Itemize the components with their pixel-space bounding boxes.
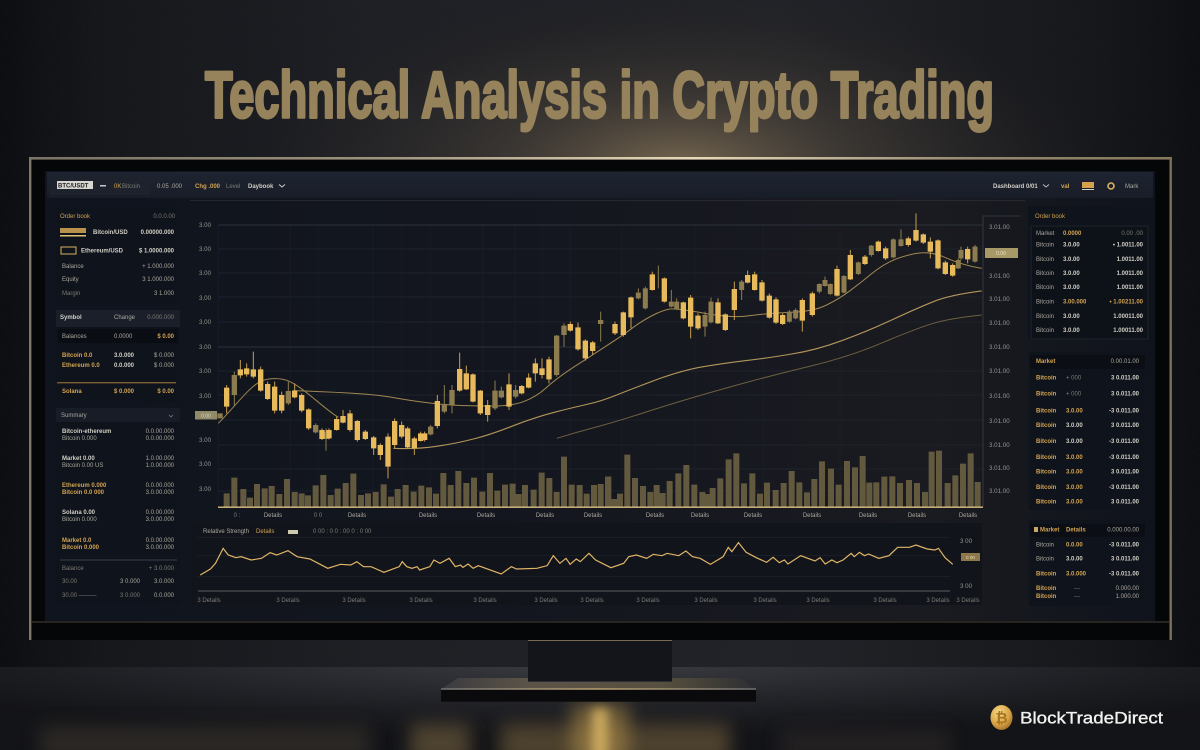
logo: BlockTradeDirect <box>990 705 1163 730</box>
oscillator time labels: 3 Details <box>694 598 718 604</box>
panel: left positions table: Change <box>114 315 136 321</box>
panel: right summary list: 3.0.00 <box>1066 556 1083 562</box>
time axis labels: Details <box>536 513 554 519</box>
logo: BlockTradeDirect: BlockTradeDirect <box>1020 708 1163 728</box>
panel: right order book: 0.00 .00 <box>1121 231 1144 237</box>
panel: right trades list: 0.00.01.00 <box>1111 359 1140 365</box>
panel: left order list: 3 1.000 <box>154 291 175 297</box>
oscillator right scale: 0 00 <box>966 555 975 560</box>
panel: right order book: 3.0.00 <box>1063 271 1080 277</box>
panel: right order book: 3.0.00 <box>1063 242 1080 248</box>
lower oscillator panel: 0 00 : 0 0 : 00 0 : 0 00 <box>313 529 372 535</box>
panel: right order book: 1.0011.00 <box>1117 285 1144 291</box>
panel: left order list: 3 1.000.000 <box>142 277 175 283</box>
top toolbar: Bitcoin <box>122 184 140 190</box>
oscillator time labels: 3 Details <box>926 598 950 604</box>
panel: left footer stats: 30.00 <box>62 579 78 585</box>
top toolbar: Level <box>226 184 240 190</box>
top toolbar: 0.05 .000 <box>157 184 183 190</box>
panel: right order book: 1.0011.00 <box>1117 257 1144 263</box>
panel: right summary list: 0.000.00.00 <box>1107 528 1140 534</box>
panel: left asset pairs: Bitcoin 0.000 <box>62 517 97 523</box>
oscillator time labels: 3 Details <box>197 598 221 604</box>
moving average lines <box>218 253 982 449</box>
panel: right order book: • 1.0011.00 <box>1113 242 1144 248</box>
panel: left asset pairs: 0.0.00.000 <box>146 538 175 544</box>
panel: left positions table: $ 0.000 <box>154 363 175 369</box>
panel: left asset pairs: 0.0.00.000 <box>146 510 175 516</box>
panel: right order book: Bitcoin <box>1036 285 1054 291</box>
time axis labels: Details <box>646 513 664 519</box>
panel: right summary list: 1.000.00 <box>1116 594 1140 600</box>
panel: right summary list: Bitcoin <box>1036 542 1054 548</box>
chart grid <box>218 225 983 507</box>
panel: left positions table: $ 0.000 <box>154 353 175 359</box>
lower oscillator panel: Relative Strength <box>203 529 249 535</box>
panel: right order book: Market <box>1036 231 1055 237</box>
panel: right summary list: 3 0.011.00 <box>1111 556 1140 562</box>
left price axis: 3.00 <box>199 344 212 351</box>
time axis labels: Details <box>348 513 366 519</box>
panel: left footer stats: Balance <box>62 566 84 572</box>
candlesticks right half <box>615 213 975 338</box>
right price axis: 3.01.00 <box>989 273 1010 280</box>
oscillator line <box>200 543 953 575</box>
panel: left footer stats: 0.0.000 <box>154 593 175 599</box>
top toolbar: val <box>1061 184 1070 190</box>
right price axis: 0.00 <box>996 251 1006 257</box>
panel: right trades list: Bitcoin <box>1036 485 1057 491</box>
panel: right order book: 3.0.00 <box>1063 285 1080 291</box>
right price axis: 3.01.00 <box>989 465 1010 472</box>
panel: right order book: Bitcoin <box>1036 257 1054 263</box>
panel: right summary list: -3 0.011.00 <box>1109 572 1140 578</box>
panel: right trades list: 3.0.00 <box>1066 408 1083 414</box>
panel: right summary list: Bitcoin <box>1036 594 1057 600</box>
panel: right trades list: -3 0.011.00 <box>1109 439 1140 445</box>
left price axis: 0.00 <box>201 414 211 420</box>
oscillator time labels <box>197 598 980 604</box>
panel: left asset pairs: 0.0.00.000 <box>146 436 175 442</box>
panel: right trades list: 3 0.011.00 <box>1111 500 1140 506</box>
panel: right trades list: 3.0.00 <box>1066 500 1083 506</box>
left price axis: 3.00 <box>199 319 212 326</box>
panel: right order book: 3.0.00 <box>1063 328 1080 334</box>
right price axis: 3.01.00 <box>989 368 1010 375</box>
icon: bitcoin coin <box>990 705 1012 730</box>
panel: right trades list: Market <box>1036 359 1055 365</box>
panel: right trades list: 3 0.011.00 <box>1111 470 1140 476</box>
oscillator time labels: 3 Details <box>409 598 433 604</box>
panel: right trades list <box>1029 352 1146 510</box>
panel: left order list: Bitcoin/USD <box>93 230 128 236</box>
oscillator time labels: 3 Details <box>873 598 897 604</box>
left price axis: 3.00 <box>199 393 212 400</box>
panel: right trades list: 3.0.00 <box>1066 485 1083 491</box>
panel: left positions table <box>56 310 180 402</box>
panel: right order book: Order book <box>1035 214 1066 220</box>
panel: left asset pairs: 1.0.00.000 <box>146 463 175 469</box>
panel: left order list <box>56 208 180 304</box>
panel: right order book: 3.0.00 <box>1063 257 1080 263</box>
panel: right order book: Bitcoin <box>1036 314 1054 320</box>
panel: right order book: 3.0.00 <box>1063 314 1080 320</box>
time axis labels: Details <box>264 513 282 519</box>
right price axis: 3.01.00 <box>989 224 1010 231</box>
panel: right trades list: Bitcoin <box>1036 423 1057 429</box>
panel: left positions table: Balances <box>62 334 87 340</box>
panel: right market data <box>1028 206 1149 606</box>
panel: right trades list: Bitcoin <box>1036 408 1057 414</box>
top toolbar <box>47 172 1153 198</box>
lower oscillator panel <box>192 523 982 605</box>
panel: right trades list: Bitcoin <box>1036 376 1057 382</box>
panel: left asset pairs: Bitcoin 0.000 <box>62 545 100 551</box>
panel: right trades list: 3.0.00 <box>1066 423 1083 429</box>
left price axis: 3.00 <box>199 486 212 493</box>
top toolbar: Chg .000 <box>195 184 221 190</box>
panel: left footer stats: 3 0.000 <box>120 593 141 599</box>
top toolbar: Dashboard 0/01 <box>993 184 1038 190</box>
panel: left footer stats: 3.0.000 <box>154 579 175 585</box>
time axis labels: Details <box>959 513 977 519</box>
panel: right summary list: — <box>1074 586 1080 592</box>
panel: left asset pairs: 1.0.00.000 <box>146 456 175 462</box>
panel: right summary list: -3 0.011.00 <box>1109 542 1140 548</box>
volume bars <box>227 451 978 507</box>
right price axis: 3.01.00 <box>989 488 1010 495</box>
oscillator time labels: 3 Details <box>753 598 777 604</box>
panel: left asset pairs: Market 0.0 <box>62 538 92 544</box>
panel: left asset pairs: 3.0.00.000 <box>146 545 175 551</box>
panel: right summary list: Details <box>1066 528 1086 534</box>
time axis labels: Details <box>477 513 495 519</box>
panel: right trades list: + 000 <box>1066 376 1082 382</box>
panel: right summary list: — <box>1074 594 1080 600</box>
left price axis: 3.00 <box>199 437 212 444</box>
panel: right summary list: 3.0.000 <box>1066 572 1087 578</box>
panel: left asset pairs: Ethereum 0.000 <box>62 483 107 489</box>
panel: left asset pairs <box>56 408 180 556</box>
panel: right order book: • 1.00211.00 <box>1110 300 1144 306</box>
time axis labels: Details <box>908 513 926 519</box>
panel: left positions table: 3.0.000 <box>114 353 135 359</box>
time axis labels <box>234 513 977 519</box>
monitor frame <box>29 157 1172 640</box>
left price axis <box>195 222 217 493</box>
oscillator time labels: 3 Details <box>473 598 497 604</box>
panel: left order list: Equity <box>62 277 79 283</box>
panel: right trades list: Bitcoin <box>1036 500 1057 506</box>
panel: left asset pairs: Bitcoin 0.00 US <box>62 463 103 469</box>
panel: right summary list: Bitcoin <box>1036 586 1057 592</box>
panel: left order list: Balance <box>62 264 84 270</box>
panel: right summary list: 0.0.00 <box>1066 542 1083 548</box>
panel: right order book <box>1028 206 1149 340</box>
panel: right order book: 0.0000 <box>1063 231 1082 237</box>
right price axis: 3.01.00 <box>989 296 1010 303</box>
panel: right order book: Bitcoin <box>1036 242 1054 248</box>
panel: left positions table: Bitcoin 0.0 <box>62 353 93 359</box>
panel: left asset pairs: Bitcoin-ethereum <box>62 429 111 435</box>
panel: left order list: 0.0.0.00 <box>153 214 176 220</box>
panel: left asset pairs: Bitcoin 0.000 <box>62 436 97 442</box>
right price axis: 3.01.00 <box>989 418 1010 425</box>
oscillator time labels: 3 Details <box>956 598 980 604</box>
lower oscillator panel: Details <box>256 529 274 535</box>
panel: left asset pairs: 0.0.00.000 <box>146 429 175 435</box>
panel: right order book: Bitcoin <box>1036 328 1054 334</box>
panel: left positions table: Ethereum 0.0 <box>62 363 100 369</box>
oscillator time labels: 3 Details <box>534 598 558 604</box>
panel: left positions table: 0.0.000 <box>114 363 135 369</box>
panel: left positions table: $ 0.00 <box>157 334 175 340</box>
panel: left footer stats: + 3.0.000 <box>149 566 175 572</box>
panel: right order book: 1.00011.00 <box>1113 314 1144 320</box>
left price axis: 3.00 <box>199 295 212 302</box>
right price axis: 3.01.00 <box>989 393 1010 400</box>
right price axis: 3.01.00 <box>989 344 1010 351</box>
panel: right trades list: Bitcoin <box>1036 392 1057 398</box>
panel: right trades list: -3 0.011.00 <box>1109 485 1140 491</box>
time axis labels: Details <box>584 513 602 519</box>
top toolbar: 0K <box>114 184 121 190</box>
panel: right summary list: 0.000.00 <box>1116 586 1140 592</box>
panel: right summary list: Market <box>1040 528 1059 534</box>
panel: left asset pairs: Bitcoin 0.0 000 <box>62 490 105 496</box>
panel: left order list: $ 1.0000.000 <box>139 248 175 254</box>
panel: left asset pairs: Solana 0.00 <box>62 510 96 516</box>
panel: right trades list: 3.0.00 <box>1066 439 1083 445</box>
panel: right trades list: -3 0.011.00 <box>1109 455 1140 461</box>
left price axis: 3.00 <box>199 461 212 468</box>
time axis labels: 0 0 <box>314 513 323 519</box>
panel: right trades list: 3 0.011.00 <box>1111 376 1140 382</box>
floor with gold reflections <box>0 667 1200 750</box>
volume baseline <box>218 506 983 508</box>
oscillator right scale: 3 00 <box>960 583 973 590</box>
panel: right order book: 1.00011.00 <box>1113 328 1144 334</box>
oscillator time labels: 3 Details <box>580 598 604 604</box>
oscillator time labels: 3 Details <box>806 598 830 604</box>
right price axis <box>983 216 1020 507</box>
panel: right trades list: 3.0.00 <box>1066 470 1083 476</box>
oscillator right scale: 3 00 <box>960 538 973 545</box>
panel: right trades list: Bitcoin <box>1036 439 1057 445</box>
panel: left order list: 0.00000.000 <box>141 230 175 236</box>
right price axis: 3.01.00 <box>989 320 1010 327</box>
left price axis: 3.00 <box>199 368 212 375</box>
panel: left order list: Margin <box>62 291 80 297</box>
top toolbar: BTC/USDT <box>58 184 89 190</box>
left price axis: 3.00 <box>199 246 212 253</box>
oscillator time labels: 3 Details <box>276 598 300 604</box>
panel: left positions table: Symbol <box>60 315 82 321</box>
panel: left positions table: $ 0.00 <box>157 389 175 395</box>
panel: right summary list <box>1029 520 1146 606</box>
panel: left footer stats <box>56 558 180 603</box>
panel: right trades list: Bitcoin <box>1036 455 1057 461</box>
time axis labels: Details <box>803 513 821 519</box>
panel: left asset pairs: 3.0.00.000 <box>146 517 175 523</box>
main price chart <box>195 213 1020 519</box>
panel: left market summary <box>56 208 180 603</box>
panel: right trades list: -3 0.011.00 <box>1109 408 1140 414</box>
left price axis: 3.00 <box>199 222 212 229</box>
time axis labels: 0 : <box>234 513 241 519</box>
panel: left positions table: $ 0.000 <box>114 389 135 395</box>
panel: right trades list: Bitcoin <box>1036 470 1057 476</box>
candlesticks <box>220 213 975 478</box>
panel: right order book: 3.00.000 <box>1063 300 1087 306</box>
panel: left footer stats: 30.00 ——— <box>62 593 97 599</box>
screen <box>45 171 1155 621</box>
oscillator right scale <box>960 538 980 590</box>
time axis labels: Details <box>859 513 877 519</box>
time axis labels: Details <box>419 513 437 519</box>
panel: left asset pairs: Market 0.00 <box>62 456 95 462</box>
panel: right trades list: 3 0.011.00 <box>1111 423 1140 429</box>
panel: left order list: Ethereum/USD <box>81 248 124 254</box>
panel: right summary list: Bitcoin <box>1036 556 1054 562</box>
time axis labels: Details <box>691 513 709 519</box>
panel: right order book: Bitcoin <box>1036 300 1054 306</box>
oscillator time labels: 3 Details <box>636 598 660 604</box>
panel: left footer stats: 3 0.000 <box>120 579 141 585</box>
top toolbar: Mark <box>1125 184 1139 190</box>
panel: left asset pairs: 3.0.00.000 <box>146 490 175 496</box>
panel: right trades list: 3 0.011.00 <box>1111 392 1140 398</box>
top toolbar: Daybook <box>248 184 274 190</box>
panel: left asset pairs: Summary <box>61 413 87 419</box>
panel: left positions table: Solana <box>62 389 82 395</box>
panel: right order book: Bitcoin <box>1036 271 1054 277</box>
left price axis: 3.00 <box>199 270 212 277</box>
icon: bitcoin coin: ₿ <box>995 710 1008 727</box>
panel: right summary list: Bitcoin <box>1036 572 1057 578</box>
panel: right trades list: + 000 <box>1066 392 1082 398</box>
right price axis: 3.01.00 <box>989 442 1010 449</box>
panel: left positions table: 0.000.000 <box>147 315 175 321</box>
panel: left order list: + 1.000.000 <box>142 264 175 270</box>
time axis labels: Details <box>744 513 762 519</box>
oscillator time labels: 3 Details <box>342 598 366 604</box>
panel: right order book: 1.0011.00 <box>1117 271 1144 277</box>
panel: left asset pairs: 0.0.00.000 <box>146 483 175 489</box>
monitor stand <box>441 640 756 702</box>
panel: left positions table: 0.0000 <box>114 334 133 340</box>
panel: right trades list: 3.0.00 <box>1066 455 1083 461</box>
panel: left order list: Order book <box>60 214 91 220</box>
